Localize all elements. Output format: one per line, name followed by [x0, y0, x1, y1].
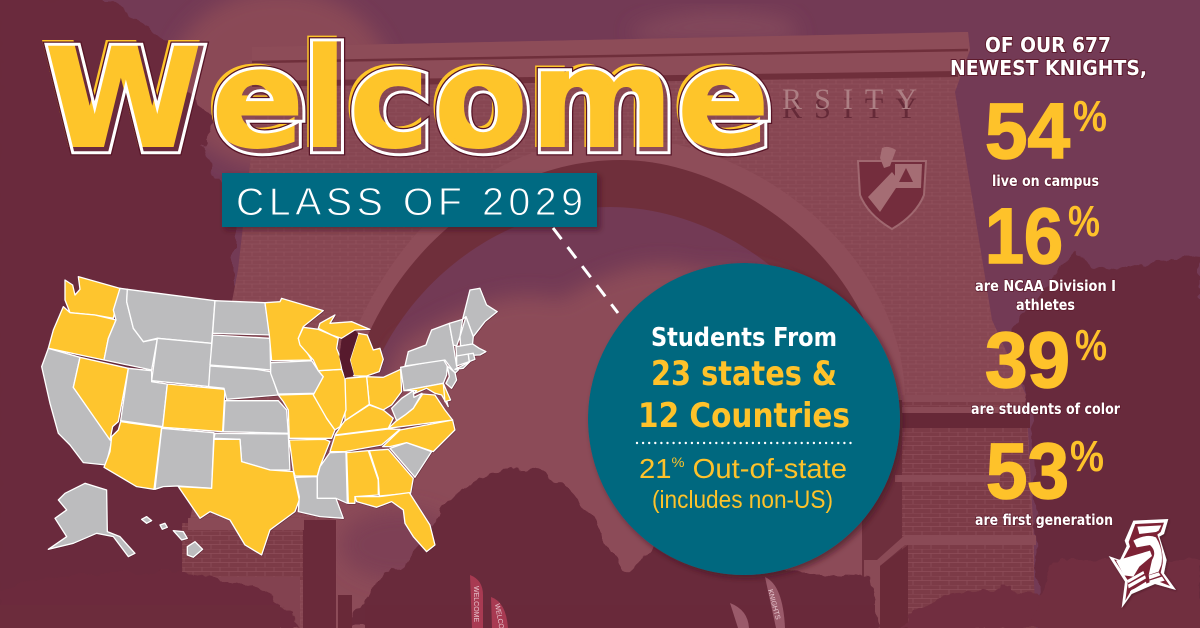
Arkansas	[289, 439, 330, 476]
Indiana	[345, 377, 369, 421]
stat: 53% first generation	[975, 426, 1113, 529]
Illinois	[313, 369, 346, 430]
circle callout: students from: (includes non-US)	[652, 486, 833, 514]
title: Welcome	[42, 36, 772, 158]
South Carolina	[390, 443, 432, 477]
Delaware	[443, 383, 451, 402]
title yellow fill: W	[41, 16, 201, 178]
New Jersey	[446, 366, 457, 388]
Mississippi	[317, 452, 347, 503]
West Virginia	[392, 391, 422, 421]
Montana	[127, 289, 215, 343]
New Mexico	[155, 428, 214, 489]
background photo: campus arch tinted maroon: RSITY	[782, 83, 917, 116]
Utah	[121, 368, 167, 427]
Vermont	[449, 319, 463, 346]
stat: 16% NCAA athletes: 16	[985, 191, 1063, 280]
stat: 53% first generation: 53	[986, 426, 1069, 515]
South Dakota	[210, 335, 271, 370]
title white outline: W	[46, 20, 206, 184]
New York	[405, 323, 458, 373]
Nebraska	[209, 366, 278, 399]
banners in the trees	[470, 575, 785, 628]
Pennsylvania	[401, 359, 447, 391]
Massachusetts	[456, 344, 486, 356]
Texas	[178, 439, 299, 555]
Maine	[463, 288, 497, 337]
icon: knight logo	[1109, 519, 1176, 608]
stat: 39% students of color: 39	[985, 315, 1070, 404]
Wisconsin	[298, 327, 342, 371]
Iowa	[271, 361, 323, 394]
Washington	[65, 277, 120, 318]
Missouri	[278, 394, 335, 438]
Arizona	[104, 422, 162, 489]
Florida	[355, 493, 435, 552]
Kansas	[223, 401, 288, 433]
stat: 53% first generation: are first generation	[975, 511, 1113, 529]
Colorado	[163, 384, 225, 432]
heading: of our 677 newest knights: NEWEST KNIGHTS,	[950, 56, 1147, 80]
stat: 39% students of color: are students of color	[971, 400, 1120, 418]
Long Island	[455, 362, 470, 369]
stat: 54% live on campus	[985, 86, 1107, 190]
Alabama	[347, 451, 378, 503]
banners in the trees: KNIGHTS	[766, 589, 781, 621]
title white outline: elcome	[212, 20, 773, 184]
North Dakota	[213, 301, 270, 335]
map of US states, yellow states represented	[42, 277, 497, 557]
heading: of our 677 newest knights	[950, 33, 1147, 80]
Wyoming	[152, 338, 212, 387]
Michigan	[318, 315, 383, 376]
stat: 16% NCAA athletes	[975, 191, 1116, 314]
circle callout: students from: 21	[639, 453, 670, 484]
Hawaii	[142, 517, 203, 557]
title white outline: W	[46, 20, 206, 184]
title white outline	[42, 37, 772, 158]
New Hampshire	[460, 317, 473, 346]
Louisiana	[295, 477, 343, 518]
circle callout: students from: 23 states &	[651, 354, 837, 394]
Nevada	[73, 357, 128, 440]
stat: 54% live on campus: 54	[985, 86, 1070, 175]
stat: 54% live on campus: %	[1073, 92, 1107, 141]
title yellow fill: elcome	[208, 16, 768, 178]
Minnesota	[265, 298, 323, 361]
stat: 16% NCAA athletes: athletes	[1016, 296, 1075, 314]
dashed connector line	[553, 228, 618, 313]
North Carolina	[383, 420, 455, 452]
stat: 54% live on campus: live on campus	[992, 172, 1099, 190]
California	[42, 348, 112, 465]
background photo: campus arch tinted maroon: RSITY	[782, 92, 917, 125]
Ohio	[367, 369, 402, 410]
Rhode Island	[468, 353, 475, 362]
Lake Michigan	[339, 331, 358, 378]
Tennessee	[330, 429, 400, 452]
circle callout: students from	[588, 263, 900, 575]
heading: of our 677 newest knights: OF OUR 677	[985, 33, 1111, 57]
Oregon	[48, 307, 116, 360]
stat: 39% students of color	[971, 315, 1120, 418]
Maryland	[404, 383, 448, 407]
banner: class of 2029: CLASS OF 2029	[236, 181, 583, 224]
Kentucky	[335, 405, 393, 435]
Virginia	[388, 394, 453, 428]
Connecticut	[457, 354, 469, 366]
stat: 16% NCAA athletes: are NCAA Division I	[975, 277, 1116, 295]
title white outline: elcome	[212, 20, 773, 184]
Georgia	[369, 449, 413, 496]
circle callout: students from: %	[672, 454, 685, 470]
banners in the trees: WELCOME	[472, 586, 479, 622]
Alaska	[48, 483, 135, 557]
circle callout: students from: 12 Countries	[638, 396, 850, 436]
stat: 16% NCAA athletes: %	[1068, 197, 1100, 246]
circle callout: students from: Out-of-state	[685, 453, 847, 484]
stat: 39% students of color: %	[1075, 321, 1107, 370]
circle callout: students from: Students From	[651, 323, 837, 353]
Idaho	[104, 288, 157, 370]
stat: 53% first generation: %	[1070, 432, 1104, 481]
Oklahoma	[214, 433, 290, 470]
